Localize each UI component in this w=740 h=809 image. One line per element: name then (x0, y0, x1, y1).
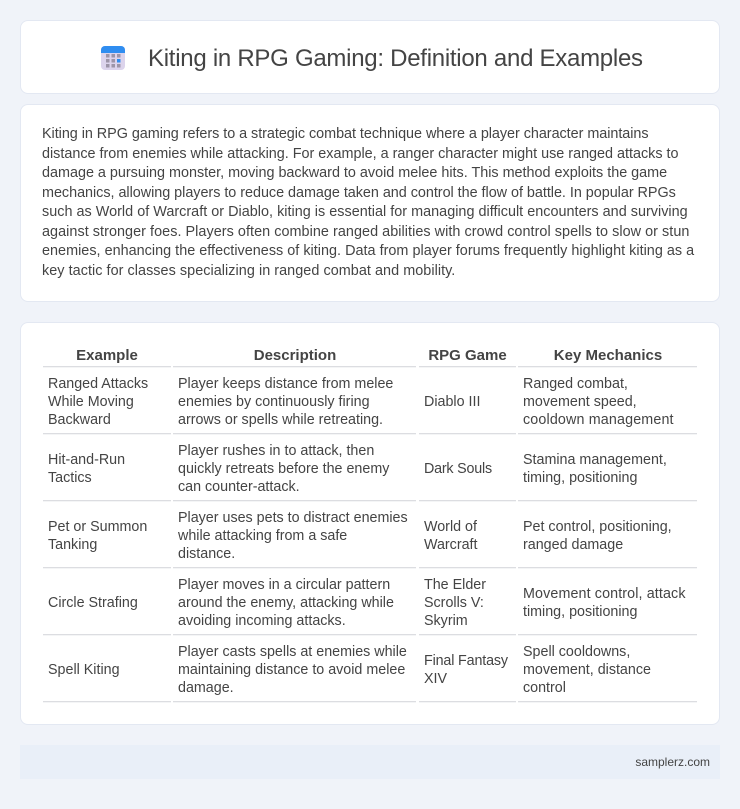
table content (43, 347, 697, 703)
row 1 (48, 376, 674, 428)
table content: Diablo III (424, 394, 480, 410)
table content: Spell Kiting (48, 662, 120, 678)
table content: Ranged Attacks (48, 376, 148, 392)
table content: Final Fantasy (424, 653, 508, 669)
table content: Backward (48, 412, 111, 428)
table content: Movement control, attack (523, 586, 686, 602)
text: such as World of Warcraft or Diablo, kiting is essential for managing difficult encounters and surviving (42, 204, 688, 220)
table content: Tanking (48, 537, 97, 553)
text: Kiting in RPG gaming refers to a strategic combat technique where a player character maintains (42, 126, 649, 142)
table content: timing, positioning (523, 604, 637, 620)
table content: While Moving (48, 394, 134, 410)
row 4 (48, 577, 686, 629)
table content: movement speed, (523, 394, 637, 410)
table content: XIV (424, 671, 447, 687)
title: Kiting in RPG Gaming: Definition and Examples (148, 45, 643, 72)
text: distance from enemies while attacking. For example, a ranger character might use ranged attacks to (42, 146, 679, 162)
table content: control (523, 680, 566, 696)
text: against stronger foes. Players often combine ranged abilities with crowd control spells to slow or stun (42, 224, 689, 240)
table content: Stamina management, (523, 452, 667, 468)
table content: Warcraft (424, 537, 477, 553)
panel: table (20, 322, 720, 725)
table content: avoiding incoming attacks. (178, 613, 346, 629)
text: mechanics, allowing players to reduce damage taken and control the flow of battle. In popular RPGs (42, 185, 676, 201)
table content: damage. (178, 680, 234, 696)
table content: distance. (178, 546, 235, 562)
header: Example: Example (76, 347, 138, 364)
table content: Skyrim (424, 613, 468, 629)
table content: Tactics (48, 470, 92, 486)
table content: can counter-attack. (178, 479, 300, 495)
table content: Hit-and-Run (48, 452, 125, 468)
header: Key Mechanics: Key Mechanics (554, 347, 662, 364)
table content: Player keeps distance from melee (178, 376, 393, 392)
row 5 (48, 644, 651, 696)
table content: Player moves in a circular pattern (178, 577, 390, 593)
table content: quickly retreats before the enemy (178, 461, 389, 477)
table content: Dark Souls (424, 461, 492, 477)
table content: around the enemy, attacking while (178, 595, 394, 611)
table content: Player uses pets to distract enemies (178, 510, 408, 526)
table content: ranged damage (523, 537, 623, 553)
table content: Spell cooldowns, (523, 644, 630, 660)
text: enemies, enhancing the effectiveness of kiting. Data from player forums frequently highlight kiting as a (42, 243, 694, 259)
header: RPG Game: RPG Game (428, 347, 507, 364)
footer bar (20, 745, 720, 779)
table content: while attacking from a safe (178, 528, 347, 544)
title card (20, 20, 720, 94)
footer text: samplerz.com (635, 755, 710, 769)
table content: Pet or Summon (48, 519, 147, 535)
table content: The Elder (424, 577, 486, 593)
table content: arrows or spells while retreating. (178, 412, 383, 428)
table content: Scrolls V: (424, 595, 484, 611)
table content: Player rushes in to attack, then (178, 443, 374, 459)
panel: intro paragraph (20, 104, 720, 302)
header: Description: Description (254, 347, 336, 364)
text: key tactic for classes specializing in ranged combat and mobility. (42, 263, 455, 279)
table content: enemies by continuously firing (178, 394, 370, 410)
icon: calendar (101, 46, 125, 70)
table content: World of (424, 519, 477, 535)
table content: maintaining distance to avoid melee (178, 662, 405, 678)
table content: Ranged combat, (523, 376, 628, 392)
row 2 (48, 443, 667, 495)
table content: Player casts spells at enemies while (178, 644, 407, 660)
table content: Pet control, positioning, (523, 519, 672, 535)
table content: Circle Strafing (48, 595, 138, 611)
intro text (42, 126, 694, 279)
table content: timing, positioning (523, 470, 637, 486)
row 3 (48, 510, 672, 562)
text: damage a pursuing monster, moving backward to avoid melee hits. This method exploits the game (42, 165, 667, 181)
table content: cooldown management (523, 412, 674, 428)
table content: movement, distance (523, 662, 651, 678)
